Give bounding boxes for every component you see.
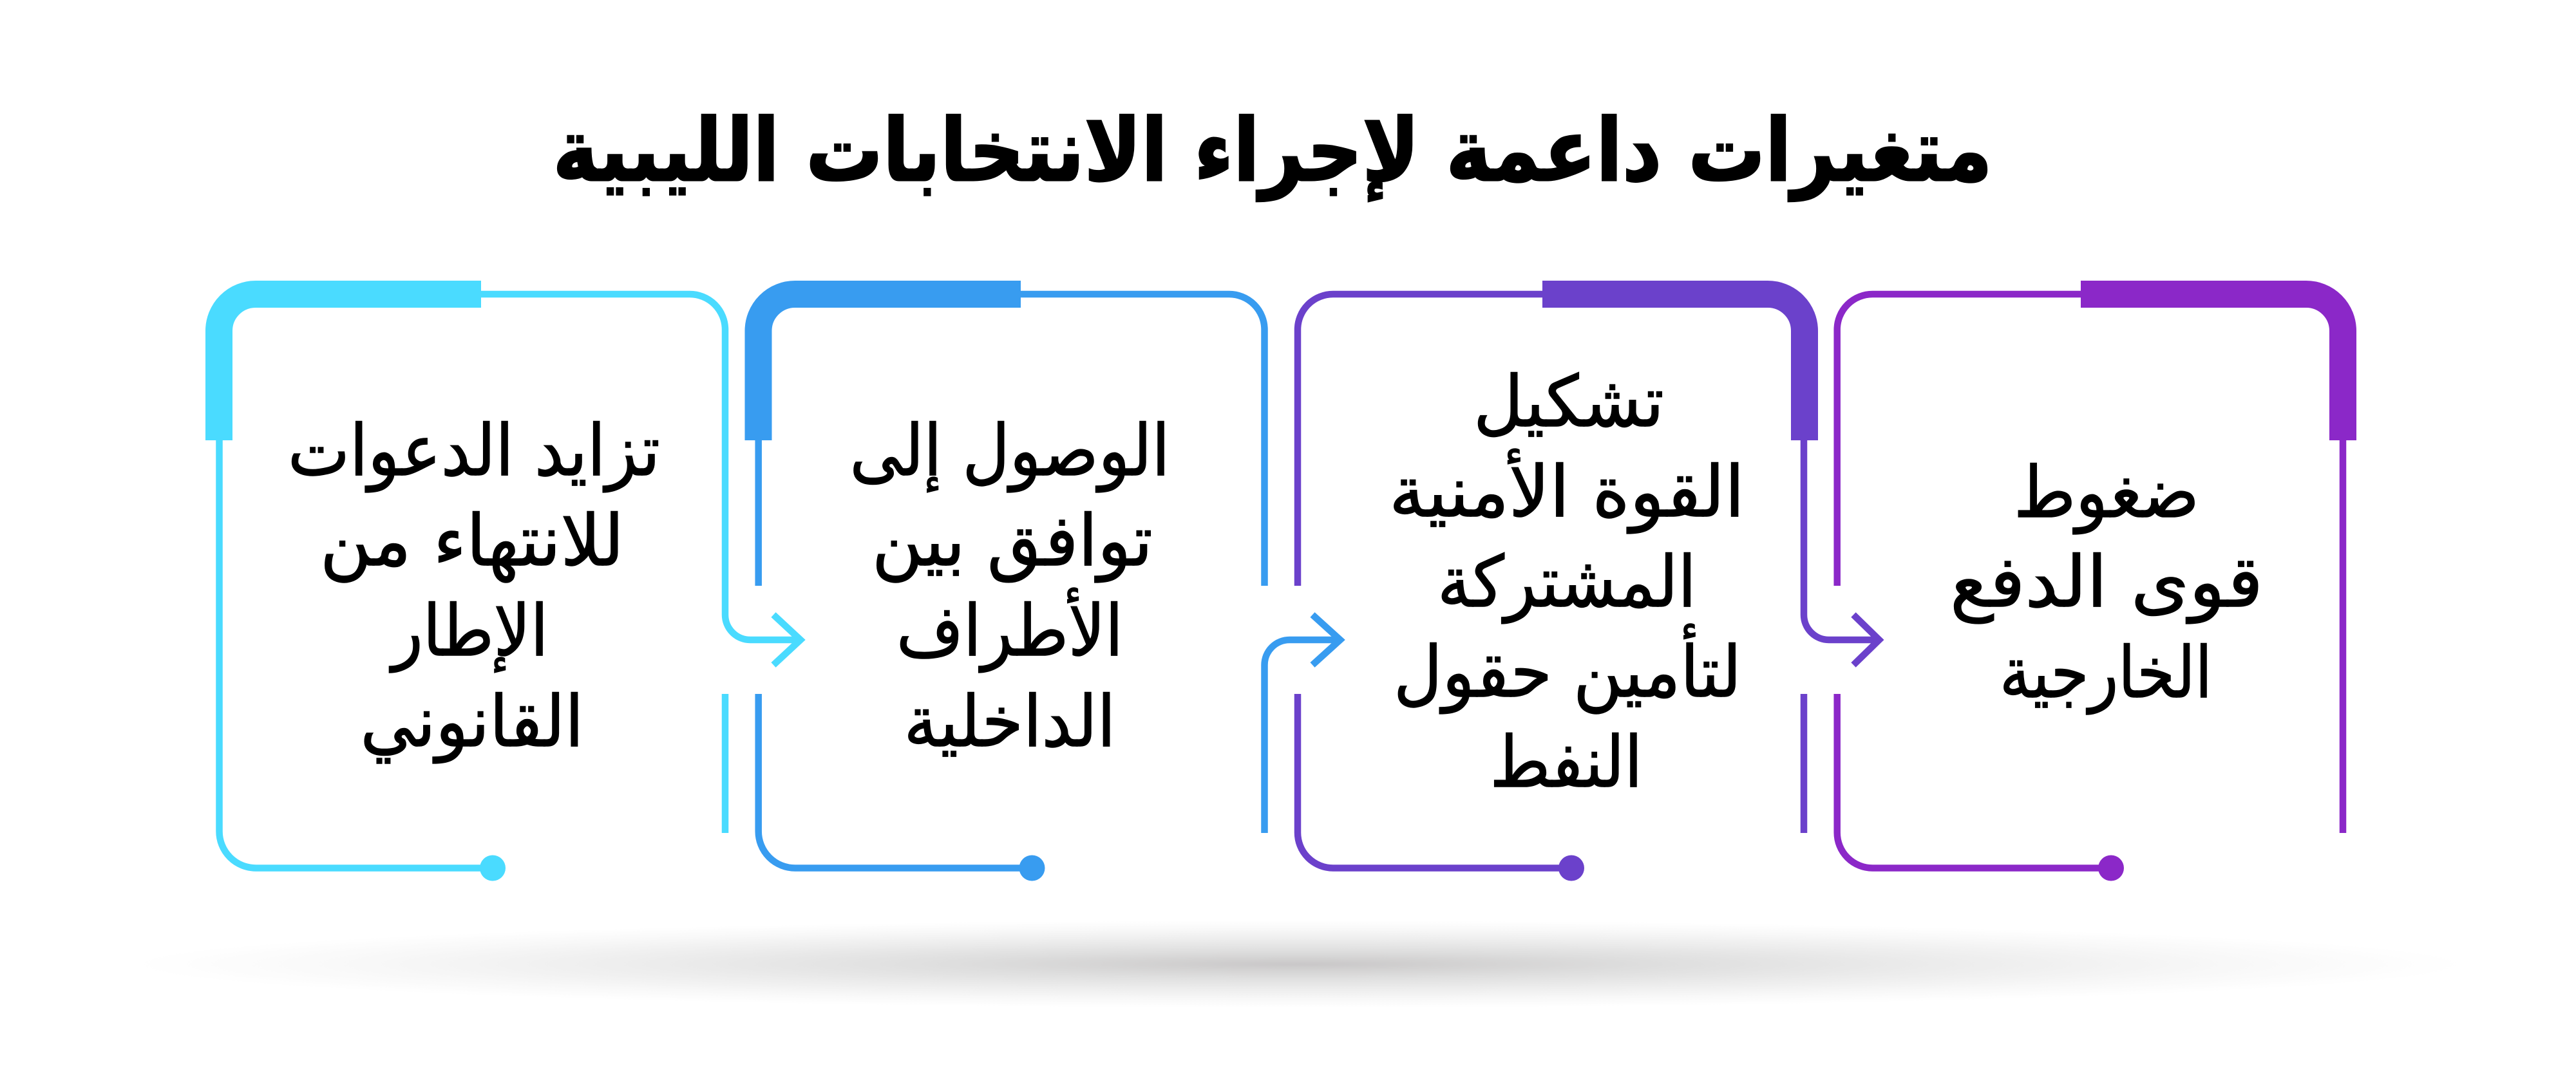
panel text: النفط [1490,721,1642,803]
thin frame upper left [1837,294,2081,586]
panel text: لتأمين حقول [1394,624,1741,714]
right stub [722,694,728,833]
thick bracket [1542,294,1804,440]
panel text: القانوني [361,680,583,763]
panel text: الأطراف [896,587,1123,673]
panel: pressure from external driving forces [1837,294,2343,881]
thin frame lower [759,694,1032,868]
panel text [288,409,660,763]
ground shadow [134,921,2465,1008]
thick bracket [2081,294,2343,440]
end dot [480,855,506,881]
panel: reaching agreement among domestic parties [759,294,1340,881]
panel text: القوة الأمنية [1389,448,1745,534]
thin frame upper left [755,440,762,586]
panel text [1950,451,2263,715]
arrow to next panel [481,294,800,665]
panel text: الداخلية [904,680,1115,763]
panel text: الوصول إلى [850,409,1170,492]
thin frame lower [1837,694,2111,868]
right stub [1801,694,1807,833]
panel text: الإطار [389,590,549,673]
panel text: قوى الدفع [1950,541,2263,624]
panel text: تشكيل [1473,360,1664,443]
panel text: توافق بين [872,500,1153,583]
panel text: الخارجية [2000,631,2212,715]
thin frame lower [1298,694,1571,868]
end dot [2098,855,2124,881]
arrow to next panel [1265,615,1340,833]
arrow to next panel [1804,440,1879,665]
panel text: تزايد الدعوات [288,409,660,492]
panel text: ضغوط [2014,451,2199,534]
panel text [850,409,1170,763]
right line [2340,440,2346,833]
title: متغيرات داعمة لإجراء الانتخابات الليبية [553,100,1993,201]
panel: forming the joint security force [1298,294,1879,881]
thick bracket [219,294,481,440]
thin frame upper left [1298,294,1542,586]
panel text: للانتهاء من [320,500,624,583]
panel text: المشتركة [1437,541,1696,624]
thin frame top right [1021,294,1265,586]
end dot [1019,855,1045,881]
panel: growing calls to end the legal framework [219,294,800,881]
end dot [1558,855,1584,881]
panel text [1389,360,1745,803]
thin frame [219,440,493,868]
thick bracket [759,294,1021,440]
